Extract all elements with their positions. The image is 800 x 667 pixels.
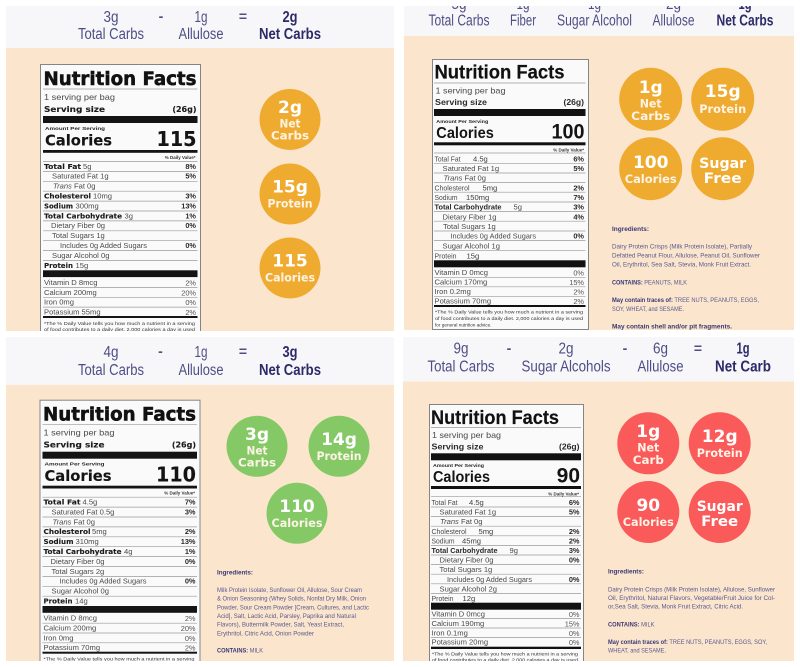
nutrition facts label bbox=[432, 60, 588, 330]
badge: 15g protein: 15g bbox=[705, 82, 741, 102]
nutrition facts label: Protein bbox=[432, 594, 454, 603]
nutrition facts label: Includes 0g Added Sugars bbox=[450, 232, 536, 241]
nutrition facts label: 5% bbox=[573, 164, 584, 173]
badge: 15g protein: Protein bbox=[699, 102, 746, 116]
nutrition facts label: Trans Fat 0g bbox=[444, 174, 486, 183]
nutrition facts label: 4.5g bbox=[82, 498, 97, 507]
nutrition facts label: 310mg bbox=[76, 537, 99, 546]
net carb equation header: Total Carbs bbox=[428, 13, 490, 30]
badge: 90 calories: 90 bbox=[636, 496, 660, 516]
nutrition facts label: *The % Daily Value tells you how much a nutrient in a serving bbox=[44, 657, 195, 662]
panel background bbox=[6, 48, 394, 331]
net carb equation header: Total Carbs bbox=[78, 26, 144, 43]
badge: sugar free: Sugar bbox=[697, 499, 743, 515]
nutrition facts label: Trans Fat 0g bbox=[440, 517, 482, 526]
nutrition facts label: Sugar Alcohol 0g bbox=[52, 251, 109, 260]
nutrition facts label: 0% bbox=[569, 556, 580, 565]
badge: 3g net carbs bbox=[226, 416, 288, 477]
panel: orange product, top left bbox=[6, 6, 394, 340]
nutrition facts label: 150mg bbox=[466, 193, 489, 202]
nutrition facts label: 0% bbox=[185, 577, 196, 586]
nutrition facts label: 0% bbox=[573, 268, 584, 278]
ingredients text: Powder, Sour Cream Powder [Cream, Cultures, and Lactic bbox=[217, 604, 369, 611]
nutrition facts label: Calcium 200mg bbox=[44, 624, 96, 632]
nutrition facts label: Nutrition Facts bbox=[431, 407, 559, 429]
badge: 110 calories: Calories bbox=[272, 516, 323, 530]
nutrition facts label: 6% bbox=[573, 154, 584, 163]
net carb equation header: Total Carbs bbox=[428, 359, 495, 376]
nutrition facts label: 4g bbox=[124, 547, 132, 556]
net carb equation header: Net Carbs bbox=[259, 362, 321, 379]
nutrition facts label: 110 bbox=[156, 463, 196, 487]
nutrition facts label: Trans Fat 0g bbox=[52, 517, 95, 526]
badge: 1g net carb: Net bbox=[637, 440, 660, 454]
badge: 100 calories: 100 bbox=[633, 153, 669, 173]
badge: 3g net carbs: 3g bbox=[245, 425, 269, 445]
badge: 15g protein bbox=[691, 68, 754, 131]
nutrition facts label: Calories bbox=[436, 125, 494, 142]
net carb equation header: Allulose bbox=[178, 26, 224, 43]
nutrition facts label: 7% bbox=[185, 498, 196, 507]
nutrition facts label: Vitamin D 0mcg bbox=[432, 610, 485, 619]
net carb equation header: Allulose bbox=[652, 13, 694, 30]
nutrition facts label: Sugar Alcohol 0g bbox=[52, 587, 109, 596]
nutrition facts label: Potassium 70mg bbox=[44, 643, 100, 652]
nutrition facts label: Sodium bbox=[434, 193, 458, 202]
nutrition facts label: 2% bbox=[185, 644, 196, 653]
ingredients text: May contain traces of: TREE NUTS, PEANUTS, EGGS, bbox=[612, 297, 759, 304]
badge: 12g protein bbox=[689, 412, 751, 474]
nutrition facts label: 9g bbox=[510, 546, 518, 555]
nutrition facts label: Saturated Fat 1g bbox=[440, 508, 496, 517]
nutrition facts label: 5mg bbox=[92, 527, 107, 536]
nutrition facts label: of food contributes to a daily diet. 2,000 calories a day is used bbox=[44, 327, 195, 332]
nutrition facts label: Saturated Fat 1g bbox=[442, 164, 499, 173]
nutrition facts label: Vitamin D 8mcg bbox=[44, 614, 97, 623]
nutrition facts label: Protein bbox=[44, 261, 73, 270]
net carb equation header: 1g bbox=[194, 344, 208, 361]
nutrition facts label: 1 serving per bag bbox=[432, 430, 501, 440]
nutrition facts label: 0% bbox=[185, 241, 196, 250]
badge: sugar free: Free bbox=[701, 514, 738, 530]
badge: 1g net carb: 1g bbox=[636, 422, 660, 442]
badge: 110 calories: 110 bbox=[279, 497, 315, 517]
badge: 1g net carb bbox=[617, 412, 679, 474]
ingredients text: Ingredients: bbox=[612, 226, 649, 233]
nutrition facts label: 3% bbox=[573, 203, 584, 212]
nutrition facts label: Includes 0g Added Sugars bbox=[60, 577, 147, 586]
nutrition facts label: 3% bbox=[185, 507, 196, 516]
nutrition facts label: 13% bbox=[181, 537, 196, 546]
nutrition facts label: 2% bbox=[573, 288, 584, 296]
nutrition facts label: Iron 0mg bbox=[44, 633, 73, 642]
nutrition facts label: 0% bbox=[185, 557, 196, 566]
ingredients text: WHEAT, and SESAME. bbox=[608, 648, 666, 655]
nutrition facts label: 4.5g bbox=[469, 498, 484, 507]
nutrition facts label: Cholesterol bbox=[44, 192, 91, 200]
nutrition facts label: Dietary Fiber 1g bbox=[442, 212, 497, 221]
nutrition facts label: 1% bbox=[185, 211, 196, 220]
nutrition facts label: 0% bbox=[185, 221, 196, 230]
nutrition facts label: 15% bbox=[569, 278, 584, 287]
ingredients text: Dairy Protein Crisps (Milk Protein Isolate), Allulose, Sunflower bbox=[608, 586, 775, 593]
nutrition facts label: 15g bbox=[76, 261, 88, 270]
badge: 2g net carbs: 2g bbox=[278, 98, 302, 118]
nutrition facts label: Total Fat bbox=[44, 162, 82, 171]
nutrition facts label: Cholesterol bbox=[432, 527, 467, 536]
ingredients text: & Onion Seasoning (Whey Solids, Nonfat Dry Milk, Onion bbox=[217, 596, 367, 603]
badge: 90 calories bbox=[617, 481, 679, 543]
nutrition facts label: (26g) bbox=[172, 105, 196, 114]
nutrition facts label: Dietary Fiber 0g bbox=[51, 221, 105, 230]
nutrition facts label: Amount Per Serving bbox=[45, 126, 105, 131]
nutrition facts label: 5mg bbox=[482, 183, 497, 192]
panel: red product, bottom right bbox=[403, 337, 794, 667]
net carb equation header bbox=[428, 6, 773, 29]
nutrition facts label: Calories bbox=[45, 132, 112, 150]
net carb equation header: Net Carbs bbox=[716, 13, 774, 30]
nutrition facts label: 14g bbox=[75, 596, 88, 606]
nutrition facts label: Sugar Alcohol 1g bbox=[442, 241, 500, 250]
nutrition facts label: 1% bbox=[185, 547, 196, 556]
nutrition facts label: 0% bbox=[573, 232, 584, 241]
nutrition facts label: Saturated Fat 1g bbox=[52, 172, 109, 181]
badge: 1g net carb: Carb bbox=[633, 453, 664, 467]
nutrition facts label: 4.5g bbox=[473, 154, 488, 163]
nutrition facts label: Amount Per Serving bbox=[433, 463, 484, 468]
net carb equation header: 2g bbox=[282, 9, 298, 26]
badge: 15g protein bbox=[260, 164, 320, 224]
nutrition facts label: Total Sugars 1g bbox=[440, 565, 492, 574]
nutrition facts label bbox=[430, 404, 584, 667]
net carb equation header bbox=[6, 346, 394, 385]
net carb equation header: Total Carbs bbox=[78, 362, 144, 379]
net carb equation header: 9g bbox=[454, 340, 468, 357]
nutrition facts label: 15% bbox=[565, 620, 580, 628]
nutrition facts label: 5% bbox=[185, 172, 196, 181]
nutrition facts label: Vitamin D 8mcg bbox=[44, 278, 97, 287]
nutrition facts label: 13% bbox=[181, 201, 196, 210]
nutrition facts label: 15g bbox=[466, 251, 479, 260]
nutrition facts label: 0% bbox=[569, 638, 580, 647]
nutrition facts label: 7% bbox=[573, 193, 584, 202]
ingredients text: Oil, Erythritol, Sea Salt, Stevia, Monk Fruit Extract. bbox=[612, 262, 751, 269]
nutrition facts label: 5mg bbox=[478, 527, 493, 536]
nutrition facts label: Potassium 55mg bbox=[44, 307, 101, 316]
nutrition facts label: Calcium 170mg bbox=[434, 278, 487, 286]
nutrition facts label: *The % Daily Value tells you how much a nutrient in a serving bbox=[432, 652, 578, 657]
nutrition facts label: Dietary Fiber 0g bbox=[50, 557, 105, 566]
net carb equation header: = bbox=[239, 8, 247, 24]
ingredients text: May contain shell and/or pit fragments. bbox=[612, 324, 732, 331]
nutrition facts label: 0% bbox=[185, 634, 196, 643]
ingredients text: or,Sea Salt, Stevia, Monk Fruit Extract, Citric Acid. bbox=[608, 604, 743, 611]
nutrition facts label: Total Carbohydrate bbox=[44, 547, 122, 556]
ingredients text: Ingredients: bbox=[217, 570, 253, 577]
nutrition facts label: (26g) bbox=[563, 97, 584, 107]
badge: 14g protein bbox=[308, 416, 370, 477]
nutrition facts label: 8% bbox=[185, 162, 196, 171]
nutrition facts label: Iron 0mg bbox=[44, 298, 74, 307]
ingredients text: SOY, WHEAT, and SESAME. bbox=[612, 306, 684, 313]
nutrition facts label: Total Carbohydrate bbox=[434, 203, 502, 212]
nutrition facts label: Protein bbox=[434, 251, 456, 260]
net carb equation header: Sugar Alcohols bbox=[522, 359, 611, 376]
nutrition facts label: 5% bbox=[569, 508, 580, 517]
ingredients text bbox=[217, 570, 369, 654]
net carb equation header: - bbox=[159, 8, 164, 24]
badge: 2g net carbs bbox=[260, 89, 320, 150]
net carb equation header: 6g bbox=[653, 340, 668, 357]
badge: 3g net carbs: Net bbox=[246, 444, 268, 458]
nutrition facts label: Serving size bbox=[432, 442, 484, 452]
badge: 3g net carbs: Carbs bbox=[238, 455, 276, 469]
badge: 115 calories: Calories bbox=[265, 271, 315, 285]
badge: sugar free: Sugar bbox=[699, 156, 746, 172]
nutrition facts label: Potassium 70mg bbox=[434, 296, 491, 306]
nutrition facts label: Dietary Fiber 0g bbox=[440, 556, 494, 565]
nutrition facts label: 1 serving per bag bbox=[44, 428, 115, 438]
ingredients text: CONTAINS: MILK bbox=[608, 621, 655, 628]
nutrition facts label: 20% bbox=[181, 288, 196, 297]
nutrition facts label: Calcium 200mg bbox=[44, 288, 97, 297]
nutrition facts label: 2% bbox=[573, 183, 584, 192]
badge: 1g net carbs: Carbs bbox=[631, 109, 670, 123]
net carb equation header bbox=[403, 342, 794, 382]
nutrition facts label: 100 bbox=[552, 120, 584, 144]
nutrition facts label: Nutrition Facts bbox=[44, 68, 196, 90]
nutrition facts label: 3% bbox=[569, 546, 580, 555]
badge: 2g net carbs: Carbs bbox=[271, 128, 309, 142]
nutrition facts label: Cholesterol bbox=[44, 527, 90, 536]
badge: 12g protein: Protein bbox=[697, 446, 743, 460]
ingredients text: Flavors), Buttermilk Powder, Salt, Yeast Extract, bbox=[217, 622, 344, 629]
nutrition facts label: 2% bbox=[185, 308, 196, 317]
badge: 110 calories bbox=[266, 483, 328, 544]
nutrition facts label: Trans Fat 0g bbox=[53, 182, 96, 191]
panel background bbox=[404, 36, 794, 330]
net carb equation header: Net Carb bbox=[715, 359, 771, 376]
nutrition facts label: 3% bbox=[185, 192, 196, 200]
nutrition facts label: 1 serving per bag bbox=[436, 86, 506, 96]
nutrition facts label: Protein bbox=[44, 596, 72, 606]
net carb equation header: - bbox=[623, 340, 628, 356]
nutrition facts label: Vitamin D 0mcg bbox=[434, 268, 488, 277]
nutrition facts label: *The % Daily Value tells you how much a nutrient in a serving bbox=[44, 321, 195, 326]
nutrition facts label: Includes 0g Added Sugars bbox=[60, 241, 147, 250]
badge: 12g protein: 12g bbox=[702, 427, 738, 447]
net carb equation header: Net Carbs bbox=[259, 26, 321, 43]
nutrition facts label: % Daily Value* bbox=[164, 491, 195, 496]
nutrition facts label: 12g bbox=[462, 594, 475, 603]
nutrition facts label: Serving size bbox=[44, 105, 106, 114]
panel background bbox=[403, 381, 794, 661]
panel: green product, bottom left bbox=[6, 337, 394, 667]
nutrition facts label: 2% bbox=[185, 614, 196, 623]
nutrition facts label: 20% bbox=[181, 624, 196, 633]
nutrition facts label bbox=[40, 64, 200, 340]
nutrition facts label: 2% bbox=[569, 536, 580, 545]
net carb equation header: Allulose bbox=[178, 362, 224, 379]
nutrition facts label bbox=[40, 400, 200, 667]
ingredients text: Ingredients: bbox=[608, 569, 644, 576]
net carb equation header: 4g bbox=[104, 344, 118, 361]
net carb equation header: = bbox=[694, 340, 702, 356]
nutrition facts label: 3g bbox=[124, 211, 133, 220]
ingredients text: May contain traces of: TREE NUTS, PEANUTS, EGGS, SOY, bbox=[608, 639, 767, 646]
ingredients text bbox=[612, 226, 760, 331]
nutrition facts label: 0% bbox=[569, 629, 580, 638]
nutrition facts label: Total Sugars 2g bbox=[52, 567, 104, 576]
nutrition facts label: 2% bbox=[569, 527, 580, 536]
nutrition facts label: Calcium 190mg bbox=[432, 619, 484, 628]
badge: 1g net carbs: 1g bbox=[639, 78, 663, 98]
net carb equation header: Allulose bbox=[638, 359, 684, 376]
ingredients text: CONTAINS: MILK bbox=[217, 647, 264, 654]
nutrition facts label: % Daily Value* bbox=[548, 491, 579, 496]
nutrition facts label: 2% bbox=[573, 297, 584, 306]
badge: 15g protein: Protein bbox=[268, 196, 312, 210]
ingredients text: CONTAINS: PEANUTS, MILK bbox=[612, 279, 688, 286]
nutrition facts label: 2% bbox=[185, 527, 196, 536]
net carb equation header: Fiber bbox=[510, 13, 536, 30]
nutrition facts label: Sodium bbox=[44, 537, 74, 546]
ingredients text: Oil, Erythritol, Natural Flavors, Vegetable/Fruit Juice for Col- bbox=[608, 595, 775, 602]
nutrition facts label: Sodium bbox=[44, 201, 73, 210]
nutrition facts label: Total Fat bbox=[44, 498, 81, 507]
badge: 14g protein: 14g bbox=[321, 430, 357, 450]
nutrition facts label: Cholesterol bbox=[434, 183, 470, 192]
badge: 14g protein: Protein bbox=[316, 449, 362, 463]
ingredients text: Defatted Peanut Flour, Allulose, Peanut Oil, Sunflower bbox=[612, 253, 760, 260]
net carb equation header: 3g bbox=[104, 9, 118, 26]
nutrition facts label: 10mg bbox=[93, 192, 112, 200]
nutrition facts label: Serving size bbox=[44, 441, 105, 450]
nutrition facts label: Nutrition Facts bbox=[434, 62, 565, 84]
nutrition facts label: Saturated Fat 0.5g bbox=[52, 507, 114, 516]
nutrition facts label: Calories bbox=[433, 469, 490, 486]
net carb equation header: - bbox=[158, 343, 163, 359]
nutrition facts label: Total Fat bbox=[434, 154, 461, 163]
nutrition facts label: Potassium 20mg bbox=[432, 638, 488, 647]
badge: sugar free bbox=[689, 481, 751, 543]
nutrition facts label: Amount Per Serving bbox=[44, 462, 105, 467]
nutrition facts label: Iron 0.1mg bbox=[432, 628, 468, 637]
nutrition facts label: 45mg bbox=[462, 536, 481, 545]
net carb equation header: 2g bbox=[558, 340, 574, 357]
panel: peanut product, top right bbox=[404, 0, 794, 331]
net carb equation header: = bbox=[239, 343, 247, 359]
nutrition facts label: Sugar Alcohol 2g bbox=[440, 584, 497, 593]
nutrition facts label: 1 serving per bag bbox=[44, 92, 115, 102]
badge: 115 calories: 115 bbox=[272, 252, 308, 272]
nutrition facts label: of food contributes to a daily diet. 2,000 calories a day is used bbox=[432, 658, 578, 663]
ingredients text: Acid], Salt, Lactic Acid, Parsley, Paprika and Natural bbox=[217, 613, 356, 620]
net carb equation header bbox=[78, 11, 320, 39]
badge: 115 calories bbox=[260, 238, 320, 298]
badge: 100 calories: Calories bbox=[625, 172, 677, 186]
badge: 2g net carbs: Net bbox=[280, 117, 301, 131]
nutrition facts label: Includes 0g Added Sugars bbox=[447, 575, 532, 584]
badge: 1g net carbs: Net bbox=[640, 96, 662, 110]
nutrition facts label: 5g bbox=[83, 162, 91, 171]
net carb equation header: 3g bbox=[282, 344, 298, 361]
net carb equation header: Sugar Alcohol bbox=[557, 13, 632, 30]
nutrition facts label: 2% bbox=[185, 278, 196, 288]
ingredients text: Dairy Protein Crisps (Milk Protein Isolate), Partially bbox=[612, 244, 753, 251]
nutrition facts label: 0% bbox=[569, 575, 580, 584]
badge: 15g protein: 15g bbox=[272, 178, 308, 198]
nutrition facts label: 5g bbox=[514, 203, 522, 212]
badge: 1g net carbs bbox=[619, 68, 682, 131]
panel background bbox=[6, 385, 394, 662]
nutrition facts label: for general nutrition advice. bbox=[435, 322, 492, 327]
nutrition facts label: Nutrition Facts bbox=[43, 404, 196, 426]
nutrition facts label: *The % Daily Value tells you how much a nutrient in a serving bbox=[435, 310, 583, 314]
nutrition facts label: of food contributes to a daily diet. 2,000 calories a day is used bbox=[435, 316, 583, 321]
nutrition facts label: Serving size bbox=[435, 97, 487, 107]
nutrition facts label: Iron 0.2mg bbox=[434, 287, 471, 296]
ingredients text: Erythritol, Citric Acid, Onion Powder bbox=[217, 630, 314, 637]
nutrition facts label: % Daily Value* bbox=[165, 155, 196, 160]
nutrition facts label: % Daily Value* bbox=[553, 147, 584, 152]
nutrition facts label: 300mg bbox=[76, 201, 99, 210]
badge: 90 calories: Calories bbox=[623, 515, 674, 529]
net carb equation header: 1g bbox=[736, 340, 750, 357]
nutrition facts label: Calories bbox=[44, 467, 112, 485]
net carb equation header: - bbox=[507, 340, 512, 356]
nutrition facts label: 6% bbox=[569, 498, 580, 507]
badge: sugar free bbox=[691, 137, 754, 200]
badge: 100 calories bbox=[619, 137, 682, 200]
nutrition facts label: 115 bbox=[156, 127, 196, 151]
nutrition facts label: 90 bbox=[557, 464, 580, 488]
nutrition facts label: Sodium bbox=[432, 536, 454, 545]
badge: sugar free: Free bbox=[704, 171, 742, 187]
nutrition facts label: 0% bbox=[569, 610, 580, 619]
net carb equation header: 1g bbox=[194, 9, 208, 26]
nutrition facts label: (26g) bbox=[559, 442, 580, 452]
nutrition facts label: Amount Per Serving bbox=[436, 119, 489, 124]
nutrition facts label: (26g) bbox=[172, 441, 196, 450]
ingredients text: Milk Protein Isolate, Sunflower Oil, Allulose, Sour Cream bbox=[217, 587, 362, 594]
nutrition facts label: Total Fat bbox=[432, 498, 458, 507]
nutrition facts label: Total Sugars 1g bbox=[443, 222, 496, 231]
nutrition facts label: Total Carbohydrate bbox=[432, 546, 498, 555]
nutrition facts label: Total Sugars 1g bbox=[52, 231, 105, 240]
ingredients text bbox=[608, 569, 775, 655]
nutrition facts label: 0% bbox=[185, 298, 196, 307]
nutrition facts label: Total Carbohydrate bbox=[44, 211, 122, 220]
nutrition facts label: 4% bbox=[573, 212, 584, 221]
